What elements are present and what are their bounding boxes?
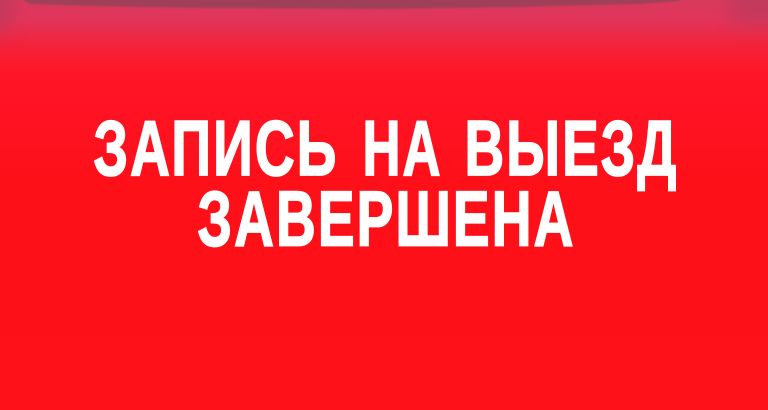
title line 1: НА xyxy=(362,104,442,192)
dark band at top edge xyxy=(20,0,680,9)
title line 1 xyxy=(94,104,678,192)
title xyxy=(94,104,678,262)
title line 2: ЗАВЕРШЕНА xyxy=(198,174,576,262)
title line 1: ВЫЕЗД xyxy=(464,104,678,192)
title line 1: ЗАПИСЬ xyxy=(94,104,338,192)
